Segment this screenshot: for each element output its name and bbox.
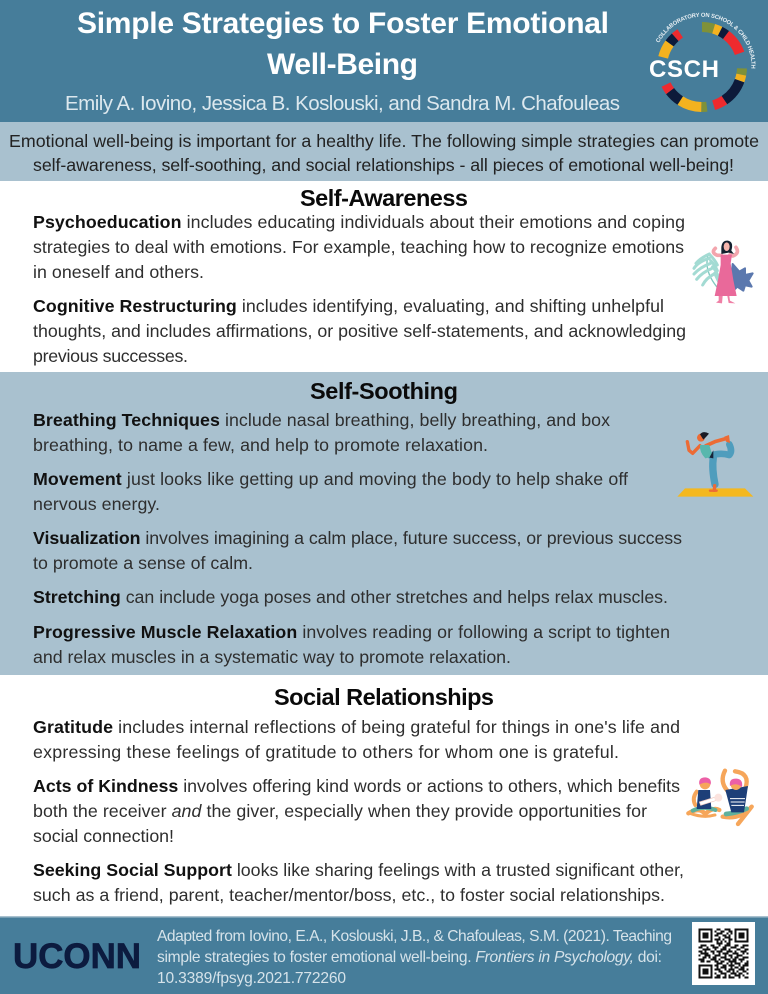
panel: introduction: self-awareness, self-soothing, and social relationships - all pieces of emotional well-being! <box>33 155 734 175</box>
panel: footer <box>0 916 768 994</box>
text: acts of kindness: Acts of Kindness involves offering kind words or actions to others, which benefits <box>33 776 680 796</box>
text: seeking social support: Seeking Social Support looks like sharing feelings with a trusted significant other, <box>33 860 684 880</box>
text: stretching: Stretching can include yoga poses and other stretches and helps relax muscles. <box>33 587 668 607</box>
text: cognitive restructuring: Cognitive Restructuring includes identifying, evaluating, and shifting unhelpful <box>33 296 664 316</box>
text: gratitude <box>33 717 680 762</box>
panel: introduction: Emotional well-being is important for a healthy life. The following simple strategies can promote <box>9 131 759 151</box>
panel: self-awareness <box>0 181 768 372</box>
heading: self-awareness: Self-Awareness <box>300 185 468 211</box>
text: psychoeducation: in oneself and others. <box>33 262 204 282</box>
text: acts of kindness: both the receiver and the giver, especially when they provide opportunities for <box>33 801 647 821</box>
text: citation: 10.3389/fpsyg.2021.772260 <box>157 970 346 987</box>
text: psychoeducation: Psychoeducation includes educating individuals about their emotions and coping <box>33 212 685 232</box>
text: gratitude: Gratitude includes internal reflections of being grateful for things in one's life and <box>33 717 680 737</box>
text: progressive muscle relaxation <box>33 622 670 667</box>
text: seeking social support <box>33 860 684 905</box>
panel: header <box>0 0 768 122</box>
text: breathing techniques <box>33 410 610 455</box>
text: citation <box>157 928 672 987</box>
panel: introduction <box>0 122 768 181</box>
logo: UCONN: UCONN <box>13 937 141 976</box>
text: psychoeducation: strategies to deal with emotions. For example, teaching how to recognize emotions <box>33 237 684 257</box>
text: seeking social support: such as a friend, parent, teacher/mentor/boss, etc., to foster social relationships. <box>33 885 665 905</box>
logo: CSCH ring: CSCH <box>649 56 719 83</box>
text: visualization: to promote a sense of calm. <box>33 553 253 573</box>
text: breathing techniques: Breathing Techniques include nasal breathing, belly breathing, and box <box>33 410 610 430</box>
icon: woman with leaves <box>694 241 753 303</box>
heading: self-soothing: Self-Soothing <box>310 378 458 404</box>
text: citation: simple strategies to foster emotional well-being. Frontiers in Psychology, doi: <box>157 949 662 966</box>
text: breathing techniques: breathing, to name a few, and help to promote relaxation. <box>33 435 488 455</box>
icon: two friends sitting <box>688 771 752 824</box>
text: visualization <box>33 528 682 573</box>
text: progressive muscle relaxation: and relax muscles in a systematic way to promote relaxation. <box>33 647 511 667</box>
panel: self-soothing <box>0 372 768 675</box>
text: acts of kindness: social connection! <box>33 826 174 846</box>
text: psychoeducation <box>33 212 685 282</box>
text: visualization: Visualization involves imagining a calm place, future success, or previous success <box>33 528 682 548</box>
title: Simple Strategies to Foster Emotional <box>77 7 609 40</box>
text: movement <box>33 469 628 514</box>
text: acts of kindness <box>33 776 680 846</box>
QR code <box>692 922 755 985</box>
text: cognitive restructuring <box>33 296 686 366</box>
text: cognitive restructuring: thoughts, and includes affirmations, or positive self-statements, and acknowledging <box>33 321 686 341</box>
text: movement: Movement just looks like getting up and moving the body to help shake off <box>33 469 628 489</box>
logo: CSCH ring: COLLABORATORY ON SCHOOL & CHILD HEALTH <box>656 12 756 68</box>
logo: CSCH ring <box>649 12 756 112</box>
authors: Emily A. Iovino, Jessica B. Koslouski, and Sandra M. Chafouleas <box>65 92 620 115</box>
text: gratitude: expressing these feelings of gratitude to others for whom one is grateful. <box>33 742 619 762</box>
title: Well-Being <box>267 48 418 81</box>
text: citation: Adapted from Iovino, E.A., Koslouski, J.B., & Chafouleas, S.M. (2021). Teaching <box>157 928 672 945</box>
panel: social relationships <box>0 675 768 916</box>
heading: social relationships: Social Relationships <box>274 684 494 710</box>
text: movement: nervous energy. <box>33 494 160 514</box>
title <box>77 7 609 81</box>
text: progressive muscle relaxation: Progressive Muscle Relaxation involves reading or following a script to tighten <box>33 622 670 642</box>
text: cognitive restructuring: previous successes. <box>33 346 188 366</box>
icon: yoga pose <box>677 432 753 497</box>
